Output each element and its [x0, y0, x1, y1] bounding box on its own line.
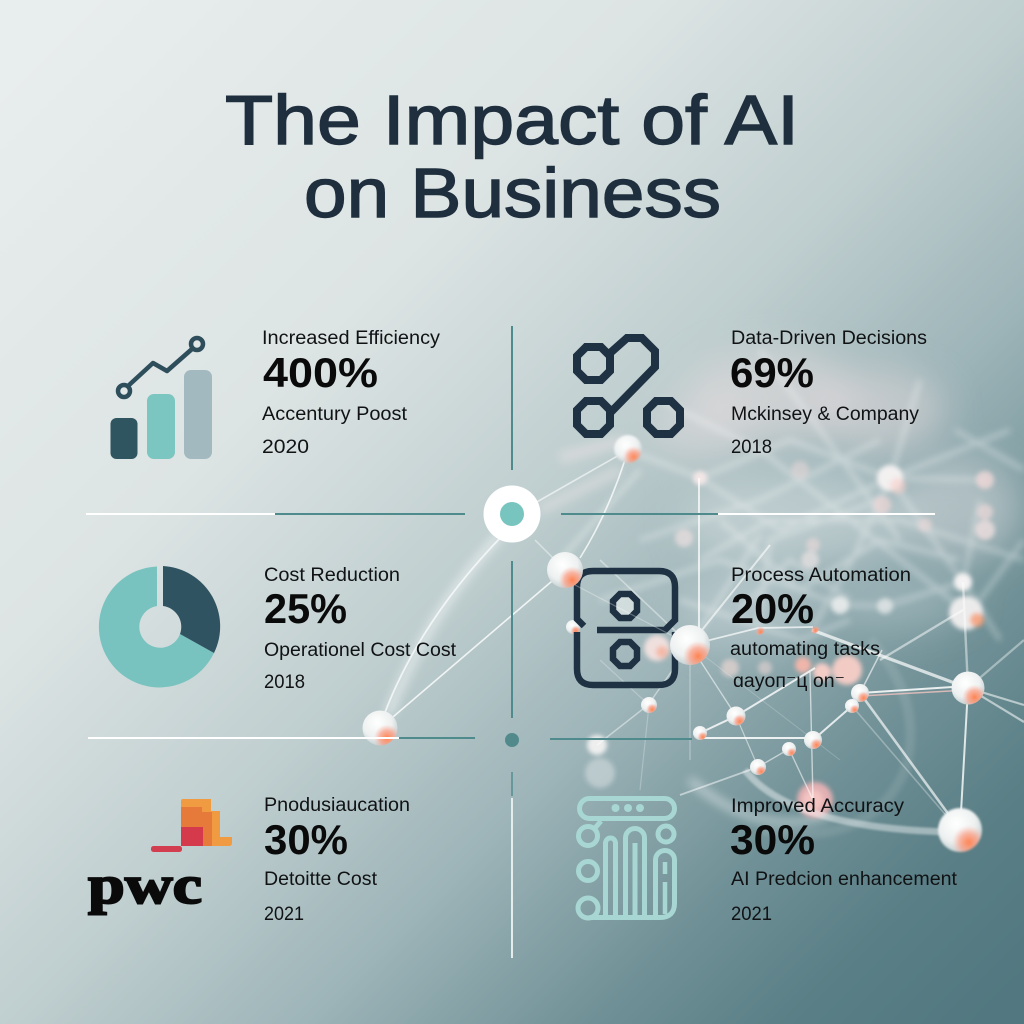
icon: bar chart with trend line — [110, 338, 212, 459]
text: data-driven decisions stat: Data-Driven Decisions — [731, 328, 927, 349]
text: productivity stat: 30% — [264, 816, 348, 863]
text: data-driven decisions stat: 69% — [730, 349, 814, 396]
text: process automation stat: Process Automation — [731, 565, 911, 586]
text: increased efficiency stat: 400% — [263, 349, 378, 396]
icon: columns and rings — [578, 798, 674, 918]
text: improved accuracy stat: 2021 — [731, 904, 772, 925]
title: The Impact of AI — [225, 81, 799, 159]
panel: improved accuracy — [578, 796, 958, 925]
text: productivity stat: 2021 — [264, 904, 304, 925]
text: increased efficiency stat: 2020 — [262, 437, 309, 458]
text: data-driven decisions stat: Mckinsey & Company — [731, 404, 920, 425]
text: process automation stat: ɑayoп⁻ц on⁻ — [733, 671, 845, 692]
icon: automation panel with two octagons — [577, 571, 675, 685]
text: improved accuracy stat: Improved Accuracy — [731, 796, 905, 817]
text: cost reduction stat: 25% — [264, 585, 347, 632]
text: process automation stat: 20% — [731, 585, 814, 632]
text: productivity stat: Pnodusiaucation — [264, 795, 410, 816]
text: cost reduction stat: Operationel Cost Cost — [264, 640, 457, 661]
icon: donut chart — [99, 566, 220, 687]
text: data-driven decisions stat: 2018 — [731, 437, 772, 458]
panel: cost reduction — [99, 565, 457, 693]
text: improved accuracy stat: 30% — [730, 816, 815, 863]
text: increased efficiency stat: Increased Efficiency — [262, 328, 441, 349]
panel: data-driven decisions — [577, 328, 927, 458]
title — [225, 81, 799, 232]
text: improved accuracy stat: AI Predcion enhancement — [731, 869, 958, 890]
front network spheres overlapping the automation icon — [547, 552, 710, 665]
text: cost reduction stat: Cost Reduction — [264, 565, 400, 586]
network graphic: blurred background nodes and links — [362, 350, 1024, 852]
panel: process automation — [577, 565, 911, 692]
panel: increased efficiency — [110, 328, 441, 459]
icon: connected octagon rings — [577, 338, 680, 434]
text: productivity stat — [264, 795, 410, 925]
text: process automation stat — [730, 565, 911, 692]
text: data-driven decisions stat — [730, 328, 927, 458]
sphere nodes — [362, 435, 984, 852]
icon: pwc logo — [88, 799, 232, 915]
text: cost reduction stat — [264, 565, 457, 693]
panel: productivity with pwc logo — [88, 795, 410, 925]
text: productivity stat: Detoitte Cost — [264, 869, 378, 890]
text: cost reduction stat: 2018 — [264, 672, 305, 693]
text: increased efficiency stat: Accentury Poost — [262, 404, 408, 425]
title: on Business — [304, 154, 721, 232]
text: process automation stat: automating tasks — [730, 639, 880, 660]
text: improved accuracy stat — [730, 796, 958, 925]
icon: pwc logo: pwc — [88, 855, 202, 915]
text: increased efficiency stat — [262, 328, 441, 458]
divider lines and center marker — [86, 326, 935, 958]
faint arc behind lower nodes — [760, 640, 910, 834]
